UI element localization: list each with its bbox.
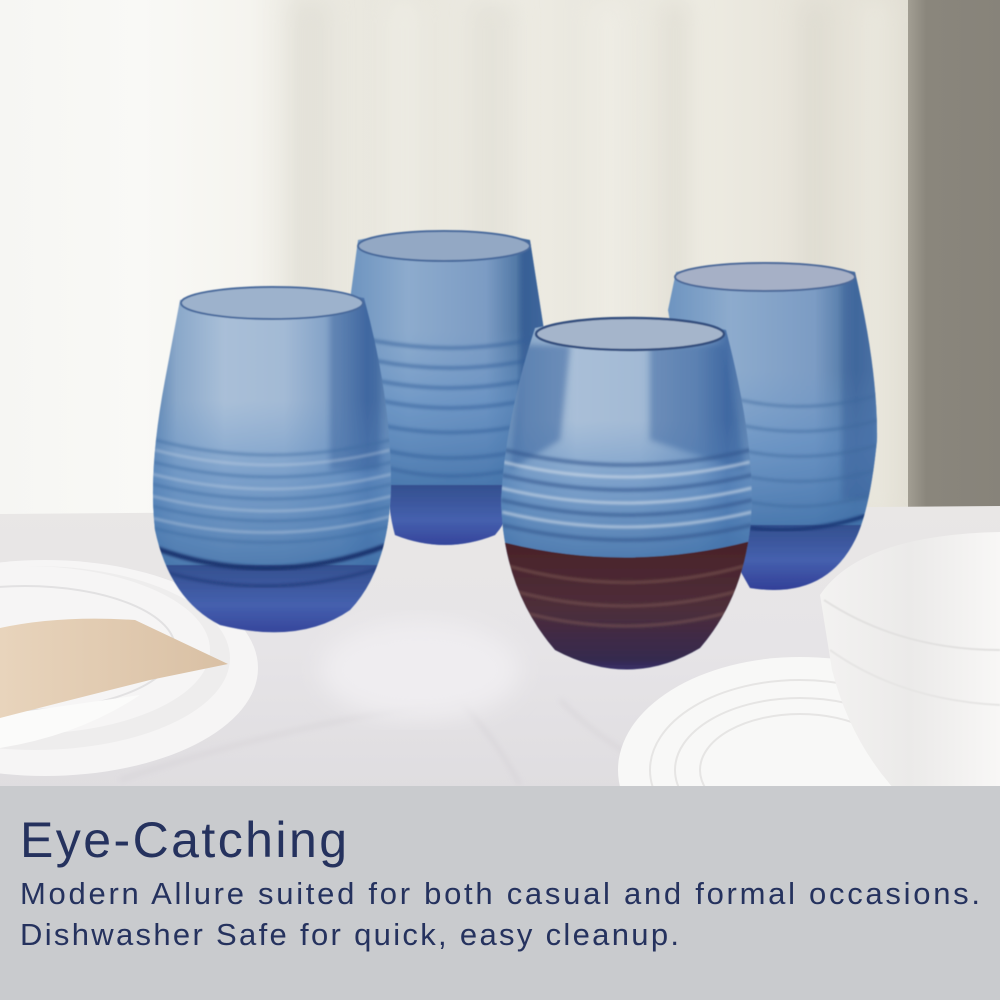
glass: front right with amber reflection — [495, 317, 755, 690]
body text: Dishwasher Safe for quick, easy cleanup. — [20, 917, 679, 952]
rim — [675, 263, 855, 291]
saucer plate: right — [618, 657, 982, 883]
body text: Modern Allure suited for both casual and formal occasions. — [20, 876, 980, 911]
marble table — [0, 506, 1000, 790]
rim — [181, 287, 363, 319]
photo background: curtain and wall — [0, 0, 1000, 520]
caption panel — [0, 786, 1000, 1000]
heading: Eye-Catching — [20, 812, 347, 868]
glass: back right — [668, 262, 883, 595]
white bowl — [820, 532, 1000, 790]
rim — [536, 318, 724, 350]
body text — [20, 876, 980, 952]
glass: front left — [150, 287, 395, 645]
plate: left with napkin — [0, 560, 258, 776]
glass: back centre — [350, 231, 550, 555]
napkin — [0, 619, 228, 718]
rim — [358, 231, 530, 261]
